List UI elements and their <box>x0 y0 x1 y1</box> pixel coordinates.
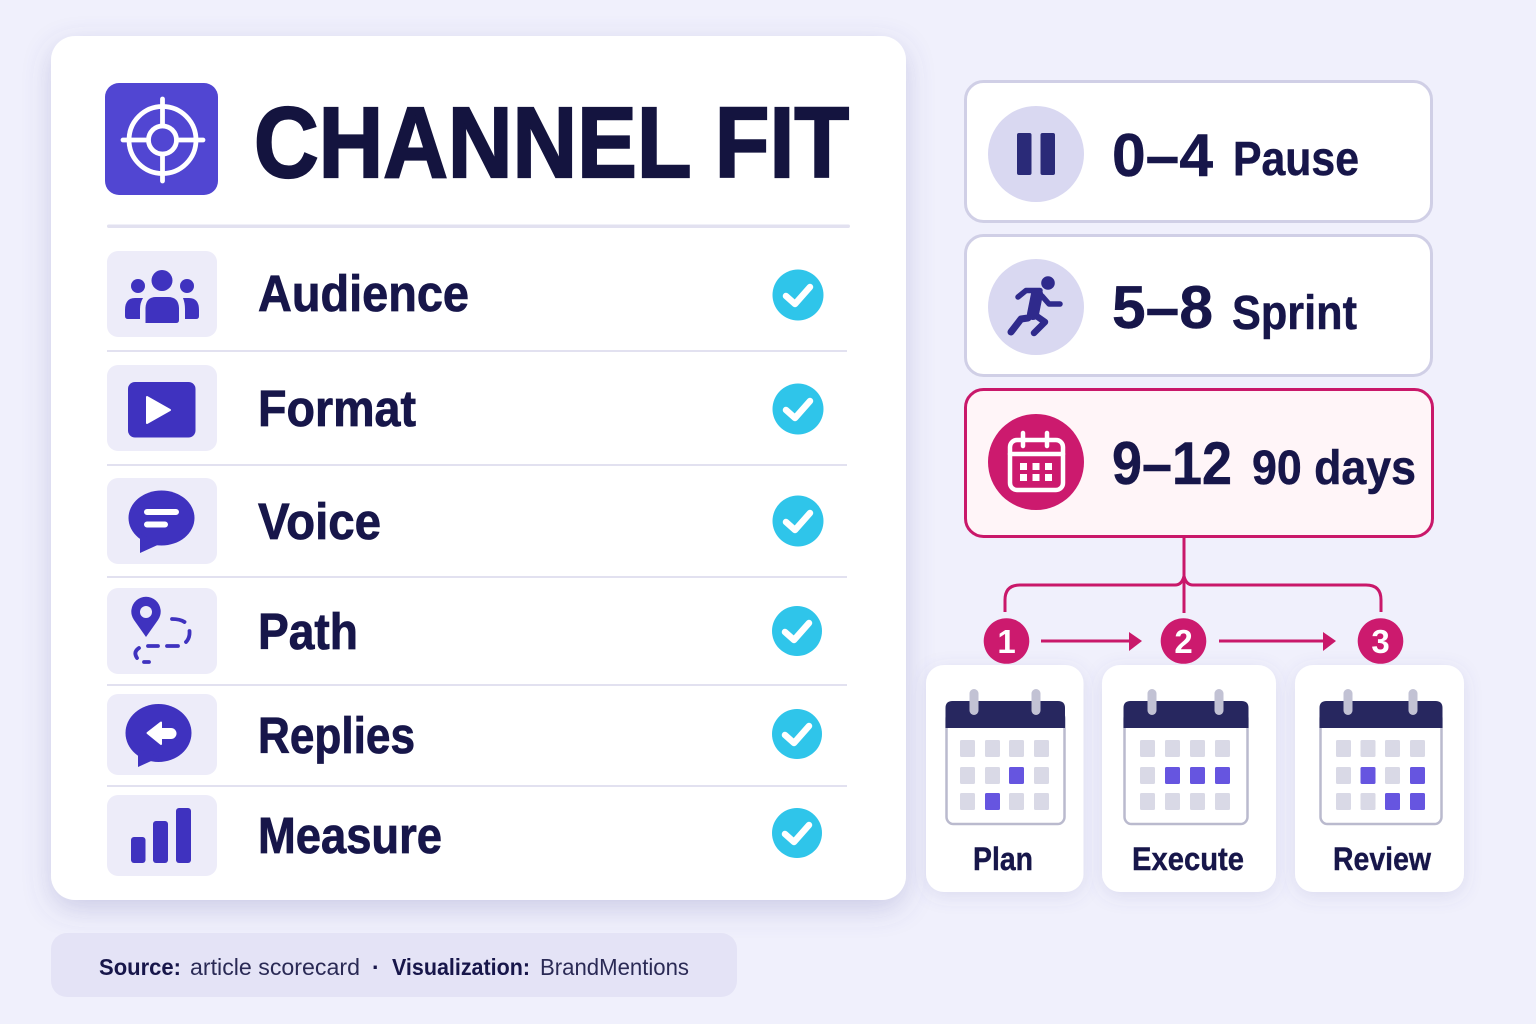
icon: check <box>772 496 824 546</box>
icon: calendar <box>988 414 1084 510</box>
icon: pause <box>988 106 1084 202</box>
badge: step 1: 1 <box>997 623 1016 660</box>
source footer: Source: <box>99 954 181 980</box>
label: Format <box>258 380 416 437</box>
range: 0–4 <box>1112 122 1214 189</box>
panel: channel fit checklist <box>51 36 906 900</box>
source footer <box>51 933 737 997</box>
icon: target <box>105 83 218 195</box>
row: Format <box>107 365 824 451</box>
label: Review <box>1333 841 1431 877</box>
label: Path <box>258 603 358 660</box>
icon: check <box>772 384 824 434</box>
row: Replies <box>107 694 822 775</box>
icon: reply bubble <box>126 704 192 767</box>
icon: map pin route <box>131 597 190 662</box>
calendar: execute <box>1124 689 1248 824</box>
icon: runner <box>988 259 1084 355</box>
score band: 5-8 Sprint <box>966 236 1432 376</box>
source footer: · <box>372 954 380 980</box>
label: Voice <box>258 493 381 550</box>
score band: 0-4 Pause <box>966 82 1432 222</box>
label: Execute <box>1132 841 1244 877</box>
source footer: article scorecard <box>190 954 360 980</box>
icon: check <box>772 270 824 320</box>
label: Audience <box>258 265 469 322</box>
icon: bar chart <box>131 808 191 863</box>
step card: Plan <box>926 665 1084 892</box>
source footer: Visualization: <box>392 954 530 980</box>
icon: check <box>772 808 822 858</box>
step card: Execute <box>1102 665 1276 892</box>
action: Sprint <box>1232 287 1357 340</box>
action: Pause <box>1233 133 1359 186</box>
icon: speech bubble <box>128 490 194 553</box>
badge: step 1 <box>984 618 1029 664</box>
badge: step 3 <box>1358 618 1403 664</box>
action: 90 days <box>1252 442 1416 495</box>
row: Voice <box>107 478 824 564</box>
badge: step 2 <box>1161 618 1206 664</box>
label: Plan <box>973 841 1033 877</box>
row: Audience <box>107 251 824 337</box>
icon: people <box>125 270 199 323</box>
source footer: BrandMentions <box>540 954 689 980</box>
calendar: review <box>1320 689 1442 824</box>
icon: check <box>772 606 822 656</box>
step card: Review <box>1295 665 1464 892</box>
label: Measure <box>258 807 442 864</box>
icon: check <box>772 709 822 759</box>
connector: 90 days to steps <box>1005 537 1381 613</box>
row: Path <box>107 588 822 674</box>
range: 5–8 <box>1112 274 1213 341</box>
arrow: step 1 to 2 <box>1041 632 1142 651</box>
title: CHANNEL FIT <box>254 87 849 199</box>
calendar: plan <box>946 689 1065 824</box>
arrow: step 2 to 3 <box>1219 632 1336 651</box>
range: 9–12 <box>1112 430 1232 497</box>
score band: 9-12 90 days <box>966 390 1432 536</box>
label: Replies <box>258 707 415 764</box>
icon: video play <box>128 382 196 438</box>
badge: step 3: 3 <box>1371 623 1390 660</box>
row: Measure <box>107 795 822 876</box>
badge: step 2: 2 <box>1174 623 1193 660</box>
